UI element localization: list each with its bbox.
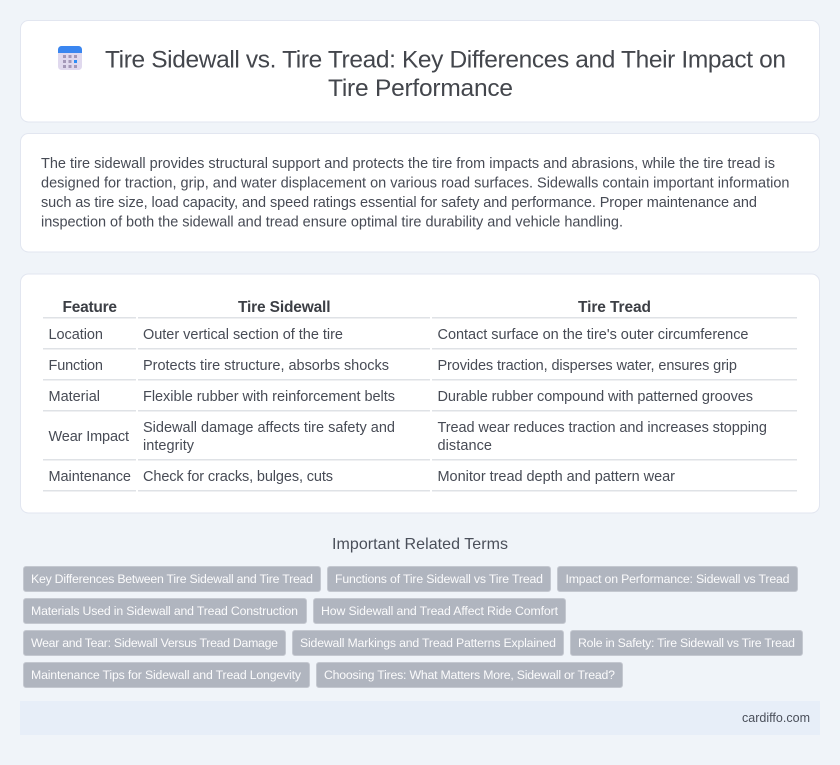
row: wear impact [48,420,767,454]
tag: Key Differences Between Tire Sidewall and Tire Tread [31,572,313,586]
tag [570,630,802,656]
table header [62,299,651,316]
row: function: Protects tire structure, absorbs shocks [143,358,389,374]
row: material: Flexible rubber with reinforcement belts [143,389,395,405]
title: Tire Sidewall vs. Tire Tread: Key Differences and Their Impact on [105,46,786,74]
row: function: Function [48,358,103,374]
text block: summary paragraph [41,156,790,230]
row: function: Provides traction, disperses water, ensures grip [438,358,737,374]
tag: Functions of Tire Sidewall vs Tire Tread [335,572,543,586]
row: maintenance [48,469,675,485]
icon: calendar [58,46,82,70]
tag [316,662,622,688]
text block: summary paragraph: The tire sidewall provides structural support and protects the tire from impacts and abrasions, while the tire tread is [41,156,775,172]
tag [558,566,798,592]
tag: Materials Used in Sidewall and Tread Construction [31,604,298,618]
tag [24,566,320,592]
tag [314,598,566,624]
tag: Maintenance Tips for Sidewall and Tread Longevity [31,668,302,682]
title [105,46,786,102]
row: material: Durable rubber compound with patterned grooves [438,389,753,405]
row: location: Location [48,327,103,343]
text block: summary paragraph: such as tire size, load capacity, and speed ratings essential for safety and performance. Proper maintenance and [41,195,757,211]
row: function [48,358,737,374]
footer [20,701,820,735]
tag: Role in Safety: Tire Sidewall vs Tire Tread [578,636,795,650]
row: wear impact: distance [438,438,492,454]
tag group: related terms [24,566,802,688]
row: location: Outer vertical section of the tire [143,327,343,343]
row: location: Contact surface on the tire's outer circumference [438,327,748,343]
panel: summary [20,134,820,252]
tag: Impact on Performance: Sidewall vs Tread [566,572,790,586]
tag [24,630,286,656]
table header: Tire Tread [578,299,651,316]
text block: summary paragraph: designed for traction, grip, and water displacement on various road surfaces. Sidewalls contain important information [41,176,790,192]
row: wear impact: Tread wear reduces traction and increases stopping [438,420,767,436]
row: maintenance: Maintenance [48,469,131,485]
heading: related terms: Important Related Terms [332,536,508,553]
tag [292,630,564,656]
title: Tire Performance [328,75,513,102]
footer: cardiffo.com [742,711,810,725]
row: maintenance: Monitor tread depth and pattern wear [438,469,675,485]
tag [24,662,310,688]
row: material [48,389,753,405]
tag: How Sidewall and Tread Affect Ride Comfort [321,604,559,618]
tag: Sidewall Markings and Tread Patterns Explained [300,636,556,650]
table header: Feature [62,299,117,316]
table header: Tire Sidewall [238,299,330,316]
tag: Choosing Tires: What Matters More, Sidewall or Tread? [324,668,615,682]
row: location [48,327,748,343]
text block: summary paragraph: inspection of both the sidewall and tread ensure optimal tire durability and vehicle handling. [41,214,623,230]
tag [328,566,550,592]
tag [24,598,306,624]
row: wear impact: Sidewall damage affects tire safety and [143,420,395,436]
tag: Wear and Tear: Sidewall Versus Tread Damage [31,636,278,650]
row: maintenance: Check for cracks, bulges, cuts [143,469,333,485]
panel: title card [20,20,820,122]
panel: comparison table [20,274,820,513]
row: material: Material [48,389,100,405]
row: wear impact: integrity [143,438,195,454]
row: wear impact: Wear Impact [48,429,129,445]
